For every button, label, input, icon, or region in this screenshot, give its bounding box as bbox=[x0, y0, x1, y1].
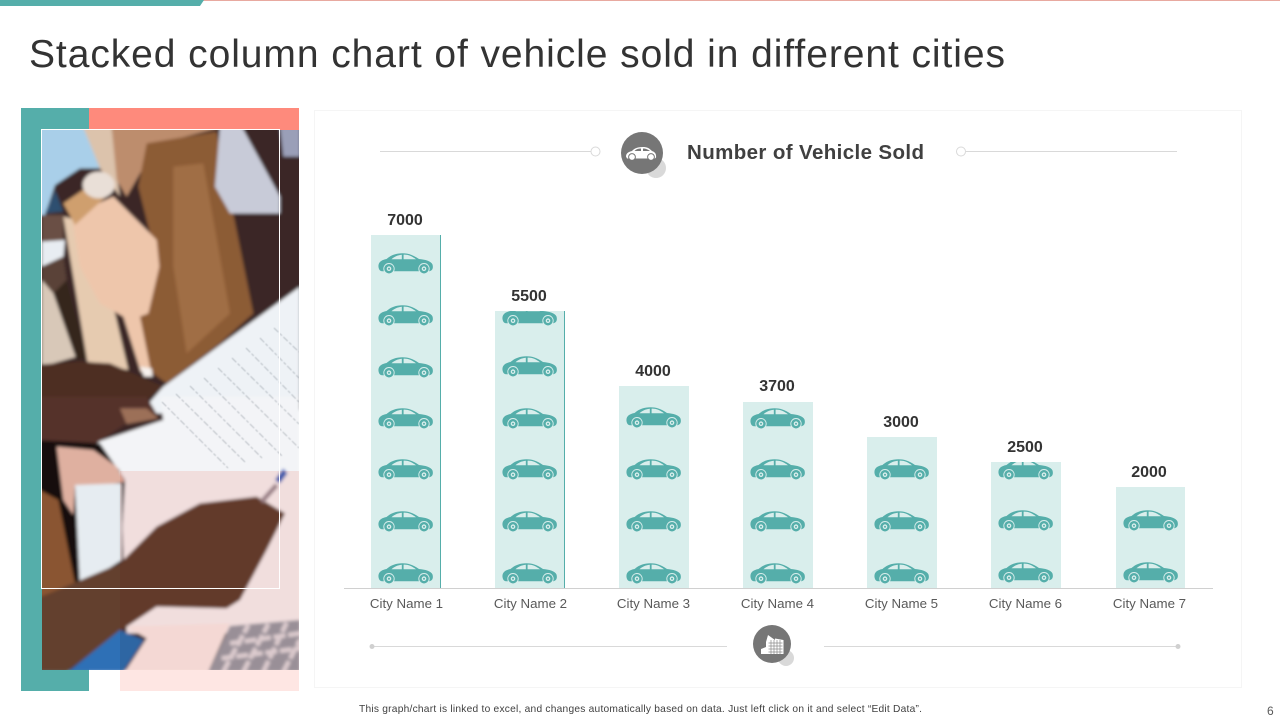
heading line left bbox=[380, 147, 600, 156]
white frame bbox=[42, 130, 280, 588]
column: City Name 7, 2000: City Name 7 bbox=[1113, 596, 1186, 611]
column: City Name 6, 2500: City Name 6 bbox=[989, 596, 1062, 611]
x-axis connector with building icon bbox=[370, 625, 1180, 666]
coral block bbox=[89, 108, 299, 130]
column: City Name 5, 3000 bbox=[865, 414, 938, 611]
panel: chart bbox=[314, 110, 1242, 688]
chart title: Number of Vehicle Sold bbox=[687, 141, 924, 164]
column: City Name 5, 3000: 3000 bbox=[883, 414, 919, 431]
column: City Name 1, 7000: City Name 1 bbox=[370, 596, 443, 611]
heading line right bbox=[956, 147, 1177, 156]
photo: hands reviewing documents bbox=[33, 123, 310, 672]
column: City Name 4, 3700: City Name 4 bbox=[741, 596, 814, 611]
column: City Name 4, 3700: 3700 bbox=[759, 378, 795, 395]
chart heading bbox=[380, 132, 1177, 178]
column: City Name 3, 4000: City Name 3 bbox=[617, 596, 690, 611]
document text bbox=[162, 328, 299, 468]
column: City Name 2, 5500: City Name 2 bbox=[494, 596, 567, 611]
column: City Name 6, 2500 bbox=[989, 439, 1062, 611]
column: City Name 3, 4000 bbox=[617, 363, 690, 611]
title: Stacked column chart of vehicle sold in different cities bbox=[29, 33, 1005, 76]
column: City Name 5, 3000: City Name 5 bbox=[865, 596, 938, 611]
column: City Name 3, 4000: 4000 bbox=[635, 363, 671, 380]
column: City Name 7, 2000: 2000 bbox=[1131, 464, 1167, 481]
column chart bbox=[344, 212, 1213, 611]
column: City Name 7, 2000 bbox=[1113, 464, 1186, 611]
column: City Name 1, 7000: 7000 bbox=[387, 212, 423, 229]
light pink block bbox=[120, 660, 299, 691]
column: City Name 2, 5500: 5500 bbox=[511, 288, 547, 305]
panel: photo with colour blocks bbox=[21, 108, 310, 691]
page number: 6 bbox=[1267, 704, 1274, 718]
icon: building badge bbox=[753, 625, 794, 666]
teal block bbox=[21, 108, 89, 691]
column: City Name 6, 2500: 2500 bbox=[1007, 439, 1043, 456]
column: City Name 2, 5500 bbox=[494, 288, 567, 611]
column: City Name 4, 3700 bbox=[741, 378, 814, 611]
top accent bar bbox=[0, 0, 1280, 6]
icon: car badge bbox=[621, 132, 666, 178]
pink overlay bbox=[120, 471, 299, 670]
column: City Name 1, 7000 bbox=[370, 212, 443, 611]
footnote: This graph/chart is linked to excel, and changes automatically based on data. Just left click on it and select “Edit Data”. bbox=[359, 704, 922, 715]
